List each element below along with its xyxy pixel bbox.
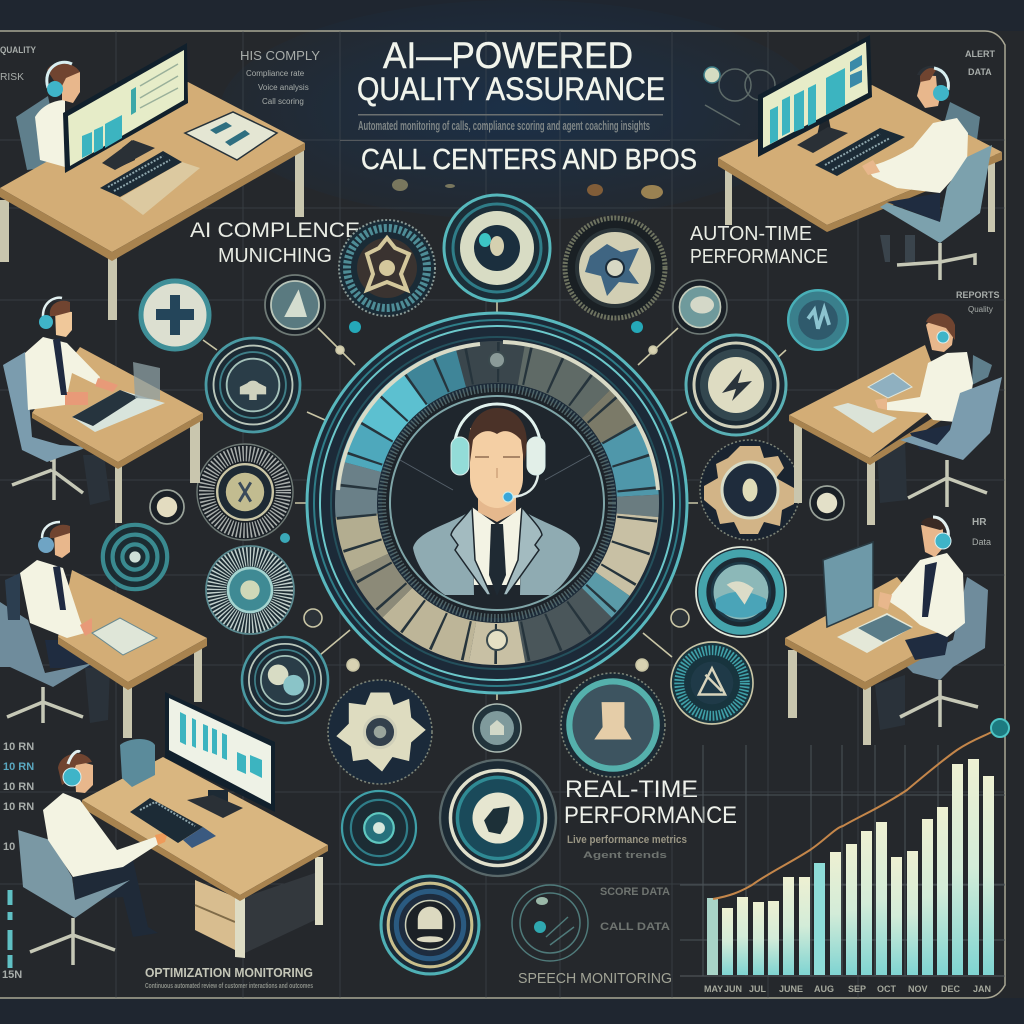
workstation: middle right	[789, 313, 1002, 525]
workstation: top right	[718, 35, 1002, 280]
minor notes: 10 RN	[3, 761, 34, 773]
mosaic ring	[356, 362, 638, 644]
minor notes: REPORTS	[956, 290, 1000, 300]
medallion: dim bottom	[512, 885, 588, 961]
medallion: right 1	[686, 335, 786, 435]
workstation: lower right	[785, 517, 988, 745]
medallion: right node	[810, 486, 844, 520]
medallion: small left	[265, 275, 325, 335]
medallion: teal small bottom	[342, 791, 416, 865]
medallion: bottom	[381, 876, 479, 974]
title: AI—POWERED	[383, 35, 633, 76]
minor notes: Quality	[968, 305, 993, 314]
medallion: upper right small	[673, 280, 727, 334]
medallion: left 1	[206, 338, 300, 432]
workstation: middle left	[3, 298, 203, 523]
note under real-time label	[567, 834, 687, 933]
workstation: lower left	[0, 522, 207, 738]
note under real-time label: Live performance metrics	[567, 834, 687, 846]
workstation: bottom left	[18, 692, 328, 965]
medallion: left node	[150, 490, 184, 524]
minor notes: 10 RN	[3, 741, 34, 753]
medallion: left 3	[206, 546, 294, 634]
axis labels: JAN	[973, 984, 991, 994]
label: real-time performance	[564, 776, 737, 829]
axis labels: OCT	[877, 984, 896, 994]
minor notes: QUALITY	[0, 45, 36, 55]
connector spokes	[203, 300, 786, 700]
growth chart	[680, 719, 1009, 994]
title	[357, 35, 665, 107]
label: AI compliance monitoring: MUNICHING	[218, 245, 332, 267]
label: speech monitoring: SPEECH MONITORING	[518, 970, 672, 987]
medallion: top centre	[444, 195, 550, 301]
medallion: upper small bottom	[473, 704, 521, 752]
axis labels: AUG	[814, 984, 834, 994]
trend end marker	[991, 719, 1009, 737]
minor notes: 10 RN	[3, 801, 34, 813]
bars	[707, 759, 994, 975]
minor notes: 10 RN	[3, 781, 34, 793]
axis labels: JUNE	[779, 984, 803, 994]
minor notes: Compliance rate	[246, 69, 305, 78]
medallion: upper right	[565, 218, 665, 318]
trend line	[713, 731, 993, 899]
axis labels: NOV	[908, 984, 928, 994]
label: auto performance: AUTON-TIME	[690, 223, 812, 245]
medallion: lower left	[242, 637, 328, 723]
label: real-time performance: REAL-TIME	[565, 776, 698, 803]
agent portrait	[413, 404, 580, 596]
hatched inner ring	[382, 388, 612, 618]
label: bottom left caption	[145, 965, 313, 990]
minor notes: DATA	[968, 67, 992, 77]
medallion: far right	[788, 290, 848, 350]
minor notes: 10	[3, 841, 15, 853]
minor notes: Call scoring	[262, 97, 304, 106]
medallion: lower right	[671, 642, 753, 724]
medallion: portrait	[561, 673, 665, 777]
label: AI compliance monitoring	[190, 219, 360, 267]
medallion: gear	[328, 680, 432, 784]
label: auto performance: PERFORMANCE	[690, 246, 828, 268]
outer rings	[307, 313, 687, 693]
minor notes: RISK	[0, 72, 24, 83]
ring node	[487, 352, 507, 650]
axis labels: SEP	[848, 984, 866, 994]
central hub	[307, 313, 687, 693]
medallion: upper left	[339, 220, 435, 316]
medallion: left 2	[197, 444, 293, 540]
medallion: concentric far left	[103, 525, 167, 589]
inner disc	[390, 396, 604, 610]
label: auto performance	[690, 223, 828, 268]
minor notes: Voice analysis	[258, 83, 309, 92]
subheading: CALL CENTERS AND BPOS	[361, 144, 697, 176]
medallion: plus sign	[141, 281, 209, 349]
label: AI compliance monitoring: AI COMPLENCE	[190, 219, 360, 242]
small glyph row	[392, 179, 663, 199]
minor notes: HR	[972, 517, 987, 528]
axis labels	[704, 984, 991, 994]
note under real-time label: Agent trends	[583, 850, 667, 860]
label: bottom left caption: OPTIMIZATION MONITORING	[145, 965, 313, 980]
faint knot icon	[704, 67, 775, 125]
minor notes: HIS COMPLY	[240, 48, 320, 63]
label: bottom left caption: Continuous automated review of customer interactions and outcomes	[145, 983, 313, 990]
minor notes: Data	[972, 537, 991, 547]
cream arcs	[338, 342, 658, 490]
note under real-time label: CALL DATA	[600, 921, 670, 933]
medallion: right 3	[696, 547, 786, 637]
medallion: gear right	[700, 440, 800, 540]
axis labels: DEC	[941, 984, 961, 994]
workstation: top left	[0, 43, 305, 320]
label: real-time performance: PERFORMANCE	[564, 802, 737, 829]
medallion: bottom centre	[440, 760, 556, 876]
side meter ticks	[8, 890, 12, 968]
minor notes: 15N	[2, 969, 22, 981]
axis labels: MAY	[704, 984, 723, 994]
subtitle strip: Automated monitoring of calls, compliance scoring and agent coaching insights	[358, 118, 650, 133]
note under real-time label: SCORE DATA	[600, 886, 670, 898]
axis labels: JUL	[749, 984, 767, 994]
axis labels: JUN	[724, 984, 742, 994]
title: QUALITY ASSURANCE	[357, 71, 665, 107]
minor notes: ALERT	[965, 49, 995, 59]
